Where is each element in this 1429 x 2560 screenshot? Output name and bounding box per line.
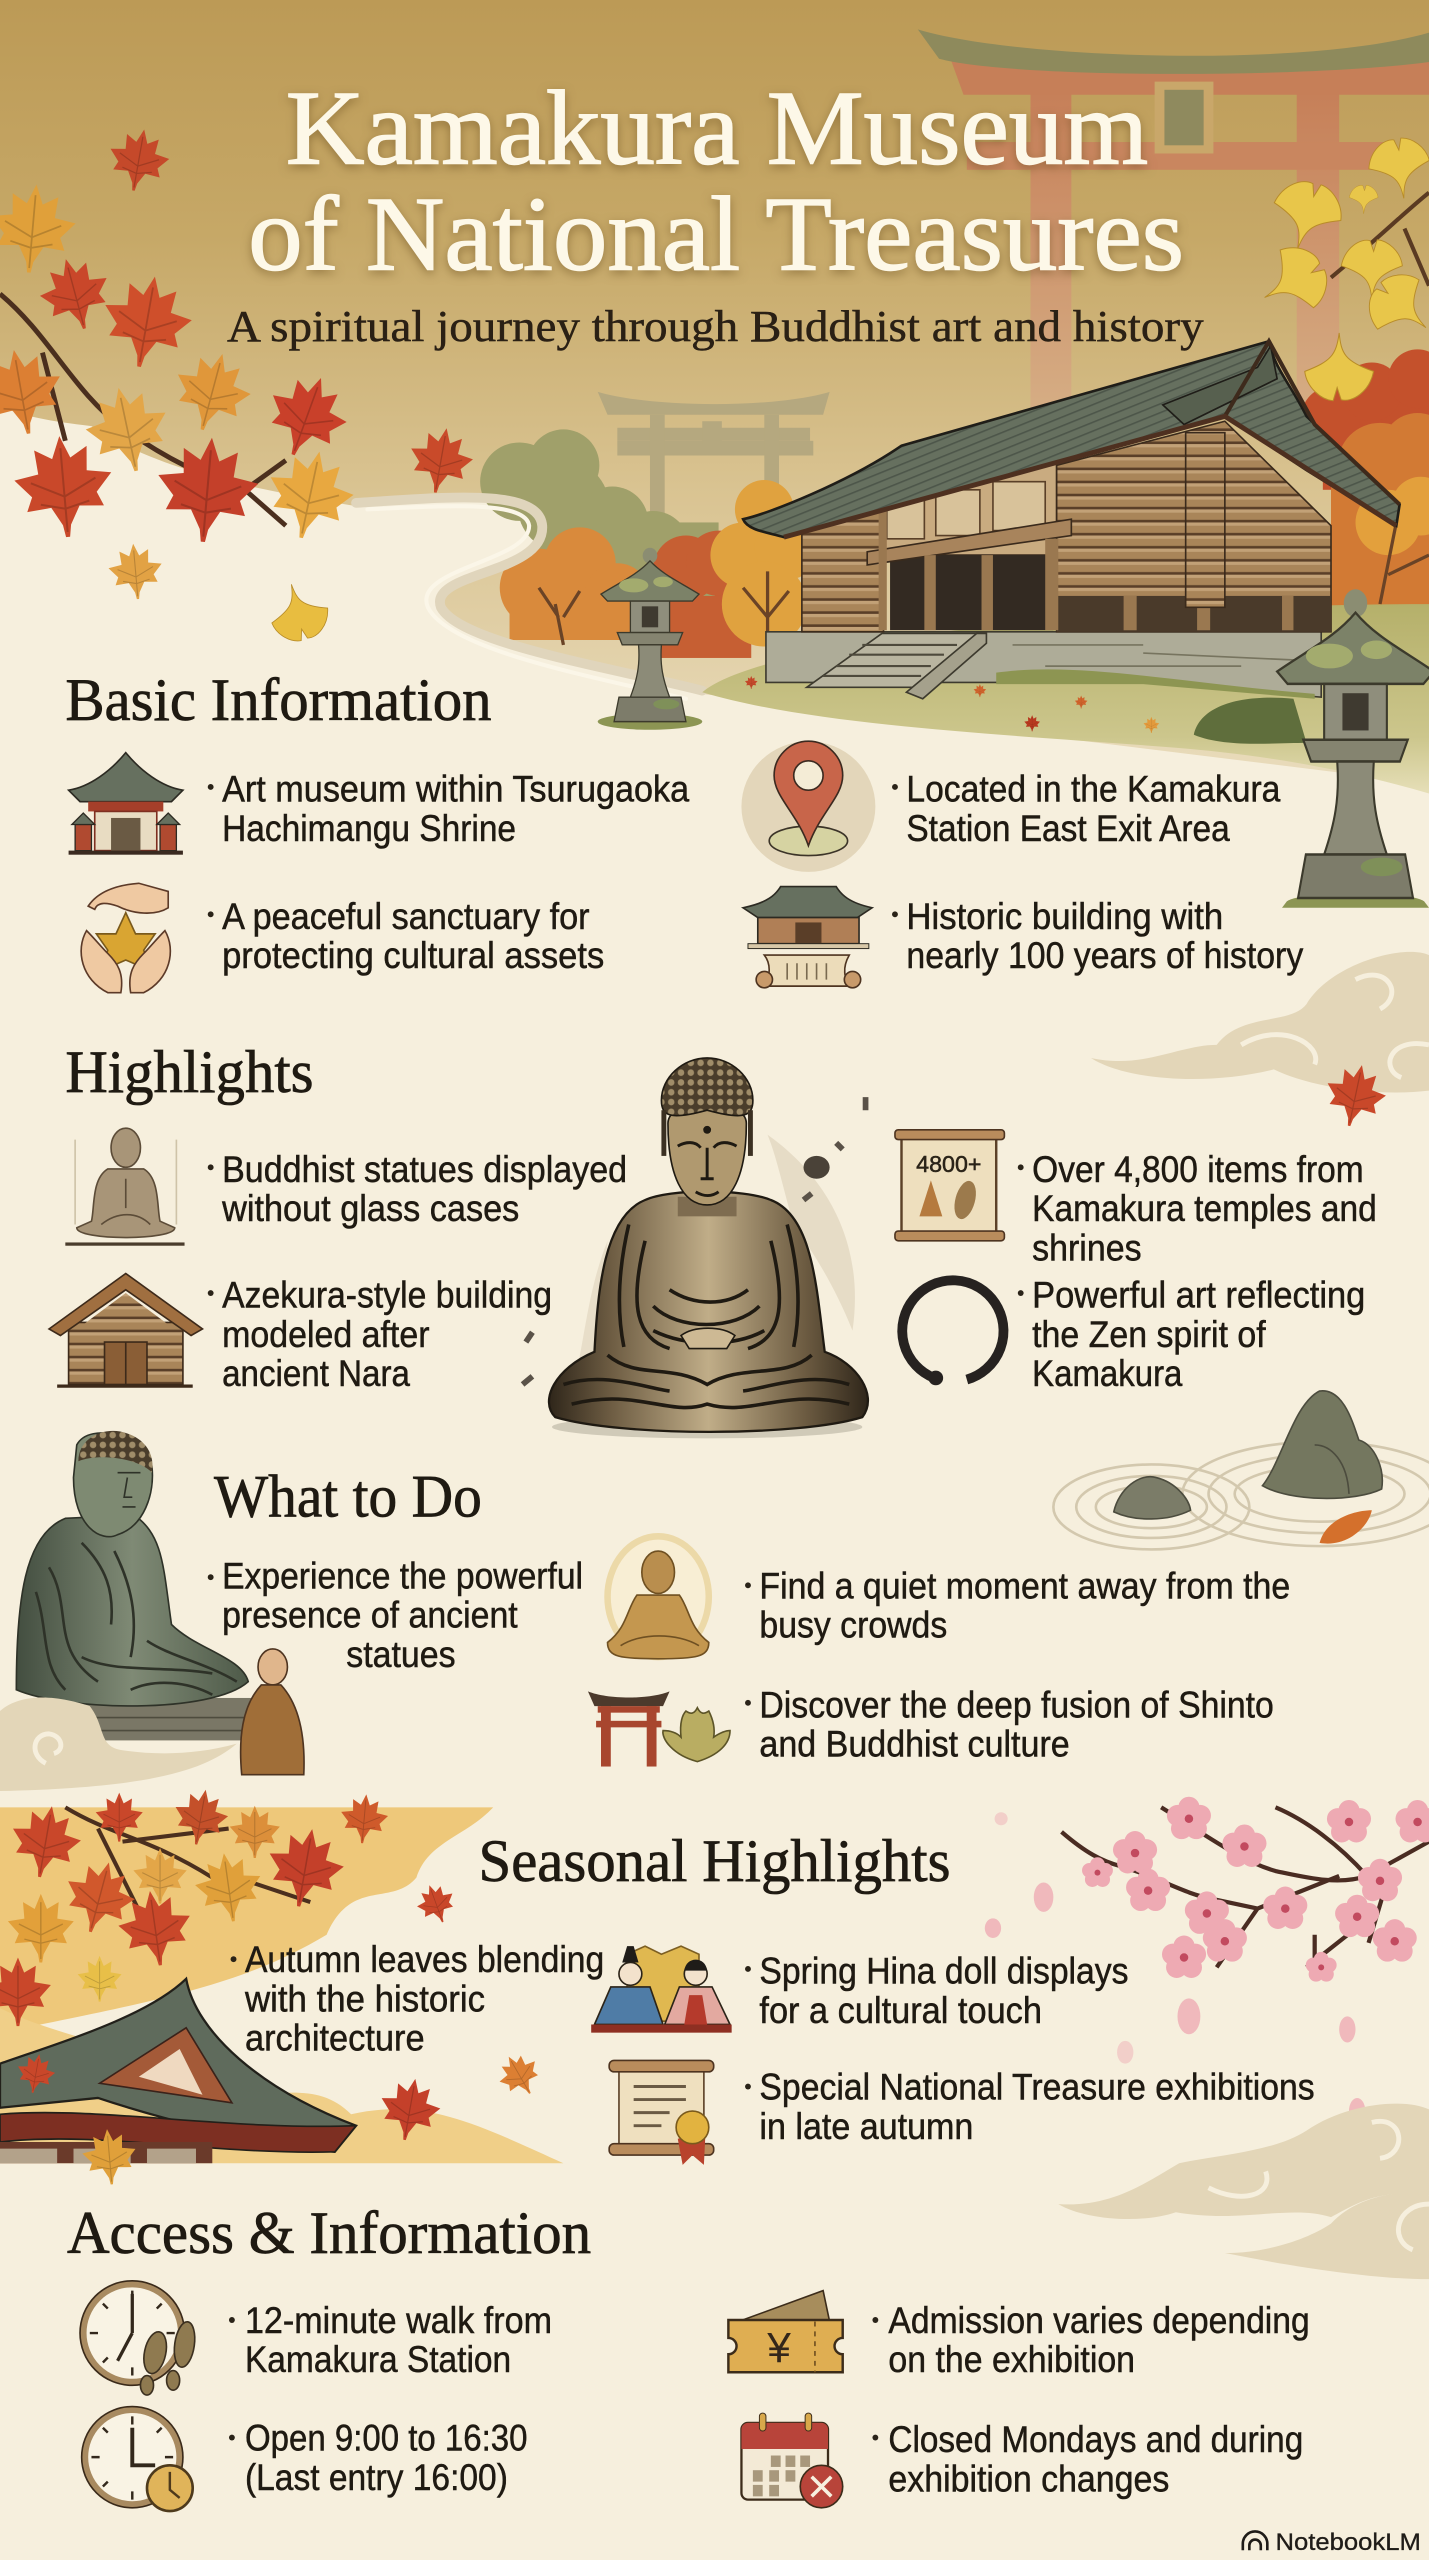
text: shinto buddhist: and Buddhist culture <box>759 1724 1070 1765</box>
text: admission: Admission varies depending <box>888 2300 1310 2341</box>
text: experience statues <box>208 1556 583 1675</box>
text: historic building: Historic building with <box>906 896 1223 937</box>
header: tan sky with river edge <box>0 0 1429 784</box>
text: experience statues: presence of ancient <box>222 1595 518 1636</box>
icon: meditating figure <box>608 1536 709 1659</box>
stone lantern small <box>598 548 702 730</box>
text: hina dolls <box>745 1951 1129 2031</box>
icon: location pin <box>741 741 875 872</box>
zen rock garden <box>1053 1391 1429 1549</box>
text: location <box>892 769 1281 849</box>
text: art museum: Hachimangu Shrine <box>222 808 516 849</box>
text: experience statues: Experience the powerful <box>222 1556 583 1597</box>
icon: protecting hands <box>81 883 170 993</box>
text: walk from station: Kamakura Station <box>245 2339 511 2380</box>
text: 4800 items: Kamakura temples and <box>1032 1188 1377 1229</box>
text: autumn leaves: architecture <box>245 2018 425 2059</box>
text: national treasure exhibitions: Special National Treasure exhibitions <box>759 2067 1315 2108</box>
subtitle: A spiritual journey through Buddhist art and history <box>227 301 1204 351</box>
text: opening hours: Open 9:00 to 16:30 <box>245 2418 528 2459</box>
cloud bottom right lower <box>1225 2193 1429 2279</box>
icon: yen ticket: ¥ <box>766 2324 791 2371</box>
text: sanctuary: protecting cultural assets <box>222 935 604 976</box>
text: azekura: modeled after <box>222 1314 430 1355</box>
text: shinto buddhist: Discover the deep fusion of Shinto <box>759 1685 1274 1726</box>
text: hina dolls: Spring Hina doll displays <box>759 1951 1129 1992</box>
falling leaves on ground <box>745 676 1159 733</box>
text: art museum: Art museum within Tsurugaoka <box>222 769 690 810</box>
text: azekura <box>208 1275 552 1394</box>
text: 4800 items: Over 4,800 items from <box>1032 1149 1364 1190</box>
text: sanctuary: A peaceful sanctuary for <box>222 896 590 937</box>
text: powerful art: Powerful art reflecting <box>1032 1275 1365 1316</box>
text: hina dolls: for a cultural touch <box>759 1990 1042 2031</box>
text: buddhist statues: Buddhist statues displayed <box>222 1149 627 1190</box>
text: national treasure exhibitions <box>745 2067 1315 2147</box>
icon: shrine <box>69 753 183 855</box>
text: location: Located in the Kamakura <box>906 769 1281 810</box>
text: experience statues: statues <box>346 1634 456 1675</box>
text: powerful art <box>1018 1275 1365 1394</box>
heading: Highlights: Highlights <box>65 1039 314 1106</box>
icon: calendar closed <box>741 2413 843 2508</box>
text: buddhist statues <box>208 1149 627 1229</box>
text: location: Station East Exit Area <box>906 808 1230 849</box>
text: closed mondays: exhibition changes <box>888 2458 1169 2499</box>
cherry blossom branch <box>985 1797 1429 2124</box>
icon: log house <box>49 1273 203 1388</box>
text: opening hours <box>229 2418 528 2498</box>
text: opening hours: (Last entry 16:00) <box>245 2457 508 2498</box>
text: buddhist statues: without glass cases <box>221 1188 519 1229</box>
text: autumn leaves <box>231 1939 604 2059</box>
heading: Access & Information: Access & Information <box>67 2200 591 2267</box>
icon: clock and footprints <box>80 2281 197 2395</box>
background: distant torii gate <box>598 392 830 516</box>
monk figure <box>241 1649 304 1775</box>
central buddha statue <box>523 1058 868 1438</box>
icon: certificate scroll <box>609 2060 714 2165</box>
text: historic building <box>892 896 1304 976</box>
temple roof in autumn band <box>0 1979 445 2187</box>
autumn band left <box>0 1785 563 2163</box>
text: 4800 items <box>1018 1149 1377 1268</box>
icon: enso circle <box>902 1280 1004 1385</box>
icon: historic building and scroll <box>743 887 872 988</box>
cloud bottom right upper <box>1058 2104 1429 2219</box>
text: admission: on the exhibition <box>888 2339 1135 2380</box>
text: shinto buddhist <box>745 1685 1274 1765</box>
text: azekura: ancient Nara <box>222 1353 410 1394</box>
title <box>248 68 1184 292</box>
heading: What to Do: What to Do <box>214 1464 482 1531</box>
cloud bottom left <box>0 1698 237 1791</box>
icon: scroll 4800+ <box>895 1130 1004 1241</box>
cloud right upper <box>1091 952 1429 1092</box>
text: 4800 items: shrines <box>1032 1227 1142 1268</box>
title: of National Treasures <box>248 174 1184 292</box>
text: quiet moment: busy crowds <box>759 1605 947 1646</box>
text: autumn leaves: Autumn leaves blending <box>245 1939 604 1980</box>
background: trees behind museum <box>480 349 1429 658</box>
left bronze buddha <box>16 1431 253 1740</box>
heading: Seasonal Highlights: Seasonal Highlights <box>479 1828 950 1895</box>
background: large torii gate <box>918 29 1429 416</box>
text: art museum <box>208 769 690 849</box>
maple leaf under cloud <box>1320 1059 1391 1132</box>
text: closed mondays: Closed Mondays and during <box>888 2419 1303 2460</box>
heading: Basic Information: Basic Information <box>65 667 492 734</box>
icon: buddhist statue <box>65 1128 185 1246</box>
text: walk from station: 12-minute walk from <box>245 2300 552 2341</box>
icon: hina dolls <box>591 1946 732 2033</box>
text: admission <box>872 2300 1310 2380</box>
icon: clock and small clock <box>82 2407 193 2511</box>
text: quiet moment <box>745 1565 1290 1646</box>
text: powerful art: the Zen spirit of <box>1032 1314 1266 1355</box>
text: powerful art: Kamakura <box>1032 1353 1183 1394</box>
icon: scroll 4800+: 4800+ <box>916 1151 982 1177</box>
ground: grass under museum <box>702 604 1429 793</box>
text: walk from station <box>229 2300 552 2380</box>
notebooklm watermark: NotebookLM <box>1275 2529 1421 2556</box>
icon: torii and lotus <box>588 1691 730 1767</box>
text: closed mondays <box>872 2419 1303 2499</box>
stone lantern large <box>1194 589 1429 908</box>
text: autumn leaves: with the historic <box>244 1978 485 2019</box>
text: national treasure exhibitions: in late autumn <box>759 2106 973 2147</box>
river swirl <box>356 497 702 699</box>
title: Kamakura Museum <box>286 68 1148 186</box>
text: azekura: Azekura-style building <box>222 1275 552 1316</box>
icon: yen ticket <box>728 2291 843 2372</box>
maple branch with leaves top left <box>0 124 478 601</box>
ginkgo leaves top right <box>1248 135 1429 401</box>
ginkgo leaf on ground <box>264 577 334 647</box>
text: sanctuary <box>208 896 604 976</box>
museum building <box>743 341 1400 699</box>
text: quiet moment: Find a quiet moment away from the <box>759 1565 1290 1606</box>
text: historic building: nearly 100 years of history <box>906 935 1304 976</box>
